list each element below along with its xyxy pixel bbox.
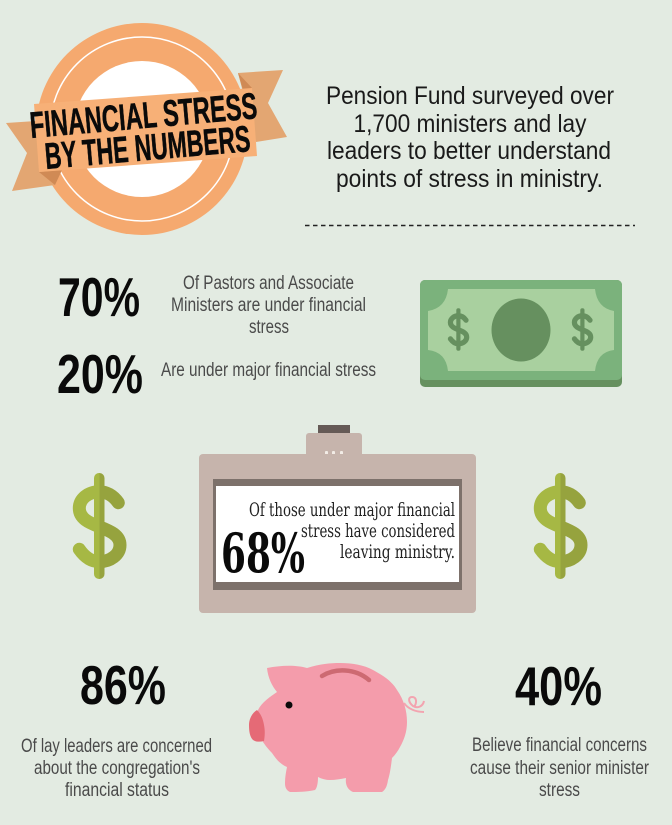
badge: financial stress by the numbers [6, 23, 287, 235]
text: 68% description [249, 499, 455, 563]
text: 86% description: Of lay leaders are concerned [21, 736, 212, 757]
text: 68% description: leaving ministry. [340, 541, 455, 563]
text: 70% description: Of Pastors and Associate [183, 273, 354, 294]
intro text [326, 82, 614, 193]
intro text: points of stress in ministry. [336, 165, 603, 193]
stat: 86%: 86% [80, 654, 166, 716]
icon: dollar sign left [79, 473, 120, 579]
stat: 20%: 20% [57, 343, 143, 405]
intro text: Pension Fund surveyed over [326, 82, 614, 110]
intro text: leaders to better understand [327, 137, 611, 165]
text: 40% description: stress [539, 780, 580, 801]
text: 86% description: financial status [65, 780, 169, 801]
text: 70% description [171, 273, 366, 338]
text: 40% description [470, 735, 650, 801]
text: 86% description [21, 736, 212, 801]
stat: 68%: 68% [221, 521, 305, 585]
text: 70% description: Ministers are under financial [171, 295, 366, 316]
title [28, 85, 259, 177]
text: 68% description: stress have considered [301, 520, 455, 542]
title: BY THE NUMBERS [43, 118, 252, 177]
stat: 70%: 70% [58, 266, 140, 328]
text: 20% description: Are under major financial stress [161, 360, 376, 381]
dashed divider [305, 224, 635, 226]
text: 70% description: stress [249, 317, 289, 338]
icon: dollar bill [420, 280, 622, 387]
icon: piggy bank [249, 663, 424, 792]
panel: monitor frame with 68% [199, 425, 476, 613]
icon: dollar sign right [540, 473, 581, 579]
text: 68% description: Of those under major financial [249, 499, 455, 521]
text: 86% description: about the congregation's [34, 758, 200, 779]
title: FINANCIAL STRESS [28, 85, 259, 146]
intro text: 1,700 ministers and lay [354, 110, 587, 138]
stat: 40%: 40% [515, 655, 602, 717]
